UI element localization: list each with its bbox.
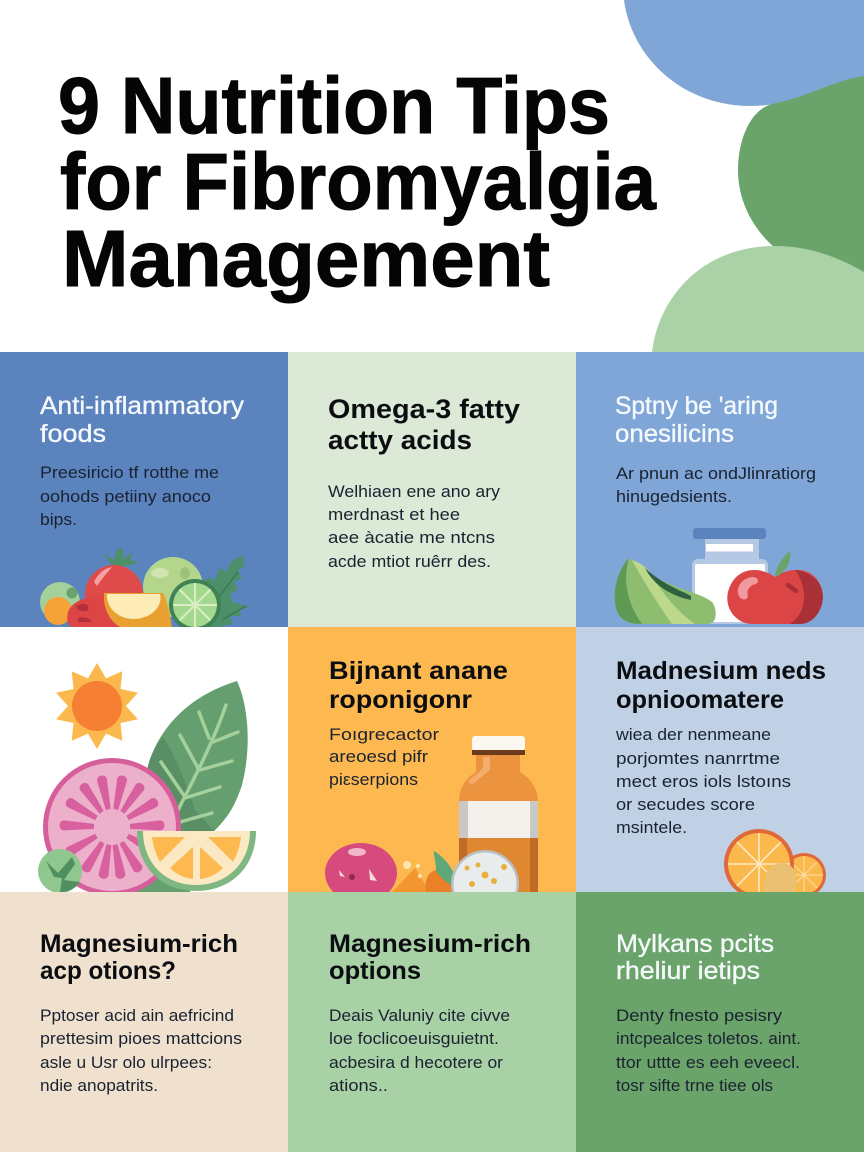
icon: orange pieces and leaf bbox=[392, 851, 459, 892]
heading: opnioomatere bbox=[616, 686, 784, 714]
body text: wiea der nenmeane bbox=[615, 725, 771, 744]
icon: white plate bbox=[451, 850, 519, 892]
icon: sun bbox=[56, 663, 138, 749]
icon: oranges bbox=[724, 829, 826, 899]
body text: bips. bbox=[40, 510, 77, 529]
heading: acp otions? bbox=[40, 957, 176, 985]
heading: Bijnant anane bbox=[329, 657, 508, 685]
heading bbox=[330, 661, 507, 713]
body text: intcpealces toletos. aint. bbox=[616, 1029, 801, 1048]
body text: merdnast et hee bbox=[328, 505, 460, 524]
body text: areoesd pifr bbox=[329, 747, 428, 766]
body text: ations.. bbox=[329, 1076, 388, 1095]
body text: oohods petiiny anoco bbox=[40, 487, 211, 506]
icon: fruit and vegetable pile bbox=[40, 548, 250, 631]
heading: Madnesium neds bbox=[616, 657, 826, 685]
body text: hinugedsients. bbox=[616, 487, 732, 506]
body text: Welhiaen ene ano ary bbox=[328, 482, 501, 501]
heading: Mylkans pcits bbox=[616, 930, 774, 958]
body text: acbesira d hecotere or bbox=[329, 1053, 503, 1072]
icon: supplement bottle bbox=[459, 736, 538, 892]
title: Management bbox=[62, 214, 550, 303]
panel: orange supplement tip bbox=[288, 627, 576, 918]
title: 9 Nutrition Tips bbox=[58, 61, 610, 150]
panel: illustration bbox=[38, 663, 256, 892]
heading: options bbox=[329, 957, 421, 985]
icon: pink grapefruit bbox=[43, 758, 181, 896]
heading: Magnesium-rich bbox=[329, 930, 531, 958]
body text bbox=[616, 1006, 801, 1095]
heading: anti-inflammatory foods: foods bbox=[40, 420, 106, 448]
heading: anti-inflammatory foods: Anti-inflammatory bbox=[40, 392, 245, 420]
panel: spicy bearing ingredients bbox=[576, 352, 864, 627]
panel: omega-3 fatty acids bbox=[288, 352, 576, 627]
panel: magnesium needs bbox=[576, 627, 864, 899]
icon: jar, green fruit and apple bbox=[615, 528, 823, 625]
body text: Foıgrecactor bbox=[329, 725, 439, 744]
heading bbox=[615, 392, 778, 448]
panel: magnesium-rich options, cream bbox=[0, 892, 288, 1152]
title: for Fibromyalgia bbox=[60, 137, 656, 226]
heading: Magnesium-rich bbox=[40, 930, 238, 958]
heading: omega-3 fatty acids: Omega-3 fatty bbox=[328, 394, 520, 424]
heading bbox=[329, 930, 531, 985]
body text: Ar pnun ac ondJlinratiorg bbox=[616, 464, 816, 483]
heading: rheliur ietips bbox=[616, 957, 760, 985]
body text: piεserpions bbox=[329, 770, 418, 789]
body text: asle u Usr olo ulrpees: bbox=[40, 1053, 212, 1072]
body text bbox=[328, 482, 501, 571]
body text bbox=[616, 464, 816, 506]
body text: tosr sifte trne tiee ols bbox=[616, 1076, 773, 1095]
body text: Preesiricio tf rotthe me bbox=[40, 463, 219, 482]
body text bbox=[615, 725, 791, 837]
heading: anti-inflammatory foods bbox=[40, 392, 245, 448]
icon: citrus half bbox=[137, 831, 256, 891]
panel: magnesium-rich options, green bbox=[288, 892, 576, 1152]
body text: mect eros iols lstoıns bbox=[616, 772, 791, 791]
body text: Deais Valuniy cite civve bbox=[329, 1006, 510, 1025]
panel: dark green tips bbox=[576, 892, 864, 1152]
body text: ttor uttte es eeh eveecl. bbox=[616, 1053, 800, 1072]
body text bbox=[40, 1006, 242, 1095]
body text bbox=[329, 1006, 510, 1095]
body text: acde mtiot ruêrr des. bbox=[328, 552, 491, 571]
body text: prettesim pioes mattcions bbox=[40, 1029, 242, 1048]
body text: aee àcatie me ntcns bbox=[328, 528, 495, 547]
icon: pink fruit bbox=[325, 843, 397, 892]
heading: omega-3 fatty acids bbox=[328, 394, 520, 455]
body text: Pptoser acid ain aefricind bbox=[40, 1006, 234, 1025]
panel: anti-inflammatory foods bbox=[0, 352, 288, 631]
body text: Denty fnesto pesisry bbox=[616, 1006, 783, 1025]
heading bbox=[40, 930, 238, 985]
heading: Sptny be 'aring bbox=[615, 392, 778, 420]
body text bbox=[40, 463, 219, 529]
heading: omega-3 fatty acids: actty acids bbox=[328, 425, 472, 455]
heading: onesilicins bbox=[615, 420, 734, 448]
body text: msintele. bbox=[616, 818, 687, 837]
body text: loe foclicoeuisguietnt. bbox=[329, 1029, 499, 1048]
icon: leaf bbox=[130, 681, 248, 892]
body text: porjomtes nanrrtme bbox=[616, 749, 780, 768]
icon: small green ball bbox=[38, 849, 82, 893]
heading bbox=[616, 657, 826, 714]
body text: or secudes score bbox=[616, 795, 755, 814]
heading: roponigonr bbox=[329, 686, 472, 714]
body text: ndie anopatrits. bbox=[40, 1076, 158, 1095]
body text bbox=[329, 725, 439, 789]
title bbox=[58, 61, 656, 303]
decorative blobs bbox=[624, 0, 864, 352]
heading bbox=[616, 930, 774, 985]
